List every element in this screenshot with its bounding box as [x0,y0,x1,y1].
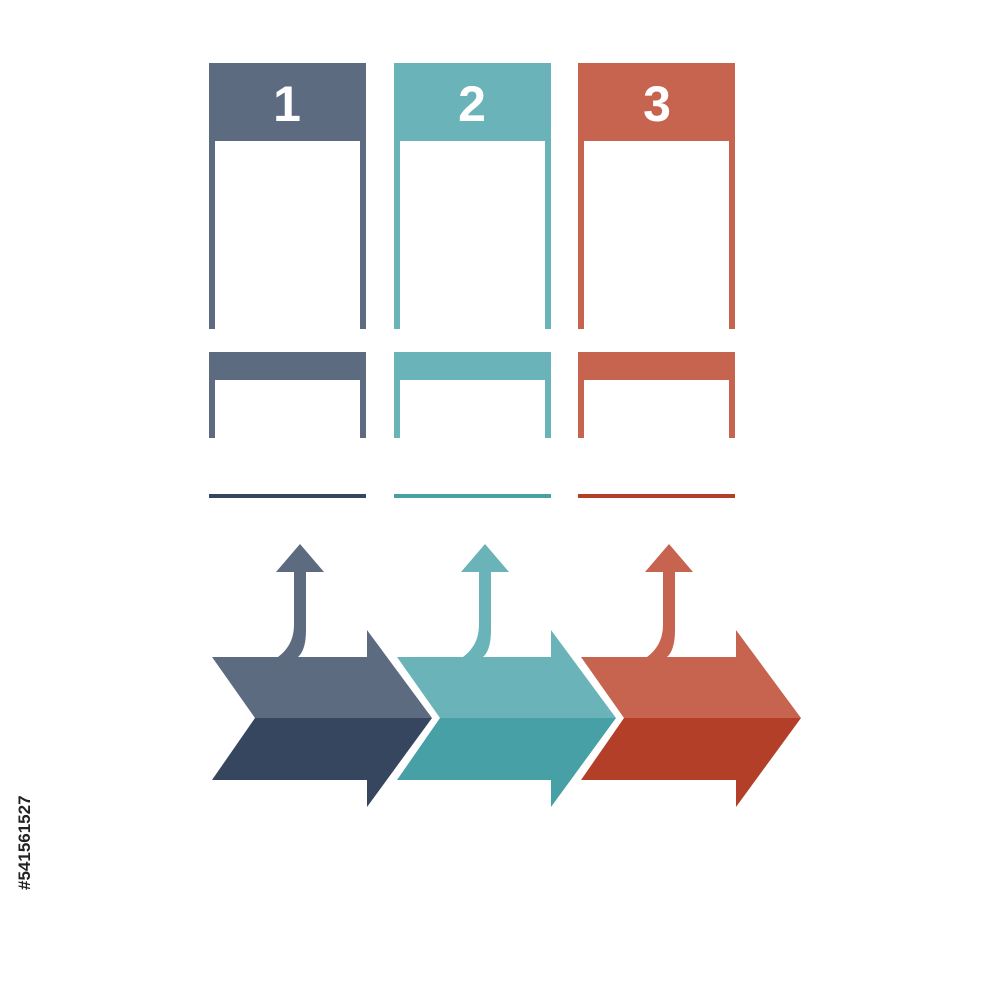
arrow 2 [397,544,616,807]
arrow 1 [212,544,432,807]
small arrow 2 [461,544,509,657]
panel 2 frame [394,63,551,329]
panel 1 frame [209,63,366,329]
small arrow 1 [276,544,324,657]
panel 3 lower frame [578,352,735,438]
arrow 3 [581,544,801,807]
line 3 [578,494,735,498]
panel 2 lower frame [394,352,551,438]
column 2 [394,63,551,498]
line 1 [209,494,366,498]
number 3: 3 [643,76,671,132]
column 3 [578,63,735,498]
panel 3 frame [578,63,735,329]
panel 1 lower frame [209,352,366,438]
number 2: 2 [458,76,486,132]
side id text: #541561527 [15,795,34,890]
number 1: 1 [273,76,301,132]
small arrow 3 [645,544,693,657]
line 2 [394,494,551,498]
column 1 [209,63,366,498]
